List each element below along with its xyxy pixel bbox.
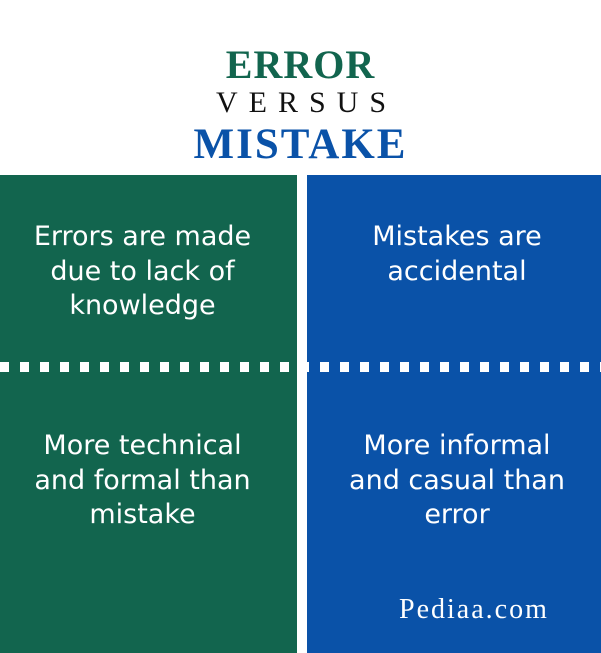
- text: mistake row 2: and casual than: [349, 464, 565, 496]
- title: versus: VERSUS: [216, 86, 397, 119]
- logo: Pediaa.com: [399, 594, 549, 625]
- text: mistake row 1: [372, 221, 542, 286]
- text: error row 1: Errors are made: [34, 221, 251, 252]
- text: error row 2: and formal than: [34, 464, 251, 496]
- text: mistake row 2: [349, 430, 565, 530]
- text: error row 1: knowledge: [69, 290, 216, 321]
- panel: mistake: [307, 175, 601, 653]
- text: error row 2: More technical: [43, 430, 242, 461]
- title: mistake: MISTAKE: [194, 121, 407, 168]
- text: mistake row 1: Mistakes are: [372, 221, 542, 252]
- text: mistake row 1: accidental: [387, 256, 527, 286]
- title: [194, 42, 407, 168]
- title: error: ERROR: [226, 42, 375, 87]
- text: error row 1: due to lack of: [50, 256, 235, 286]
- divider dotted line: [0, 362, 601, 372]
- text: mistake row 2: error: [424, 499, 490, 530]
- text: error row 1: [34, 221, 251, 321]
- text: error row 2: mistake: [89, 499, 196, 530]
- text: error row 2: [34, 430, 251, 530]
- text: mistake row 2: More informal: [363, 430, 551, 461]
- panel: error: [0, 175, 297, 653]
